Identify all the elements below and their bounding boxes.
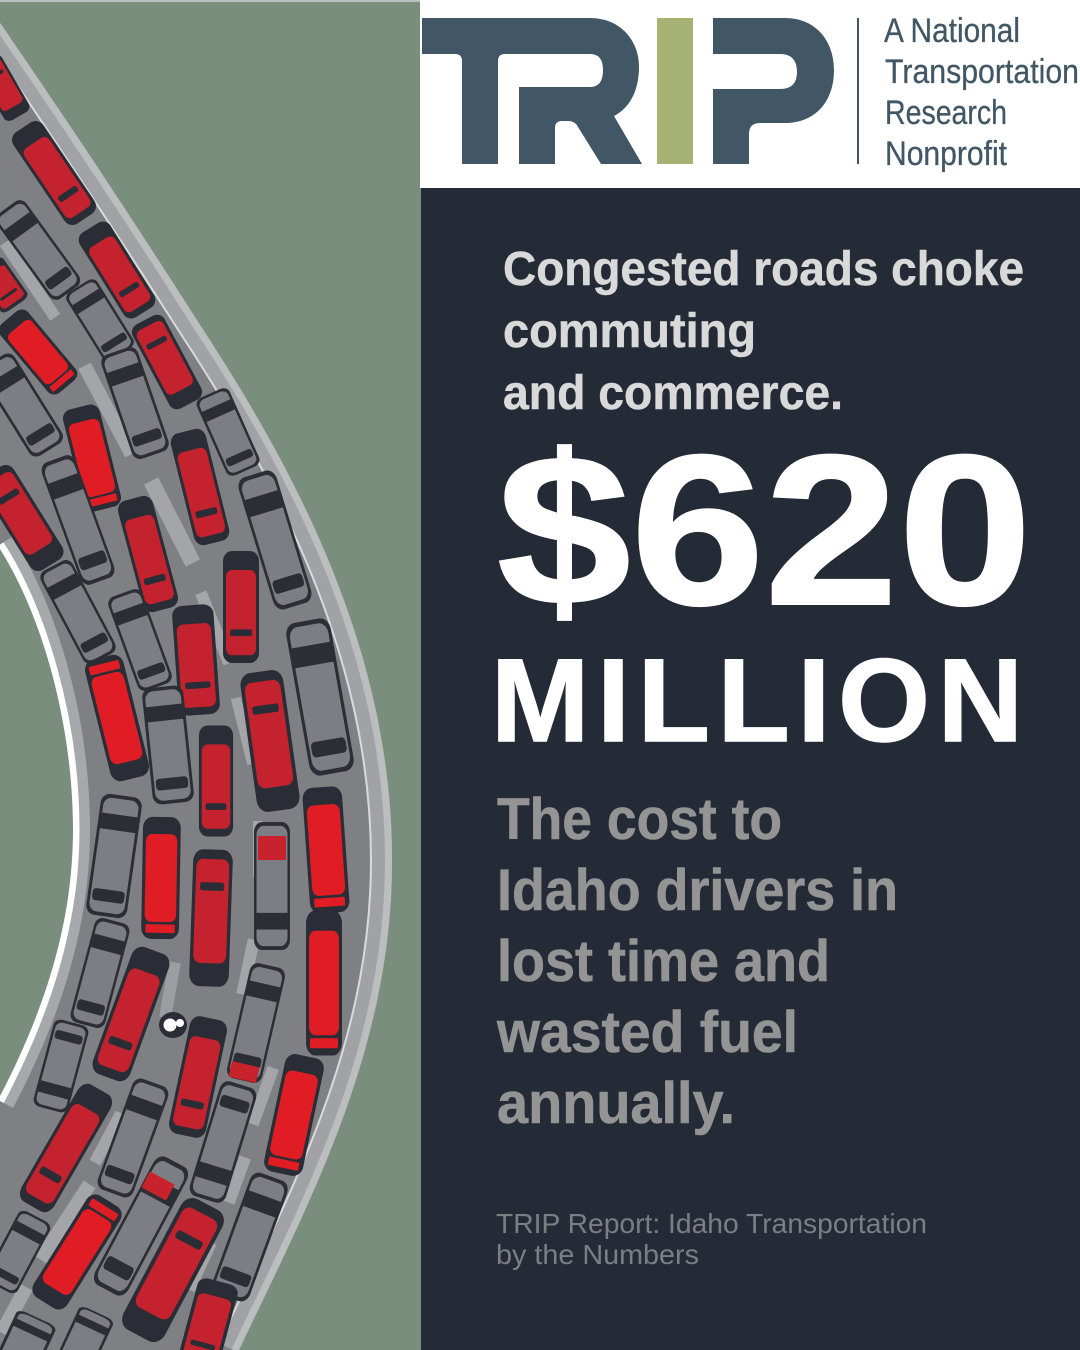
panel: dark text background	[421, 188, 1080, 1350]
logo: P letter	[713, 18, 834, 164]
big number unit: MILLION	[491, 635, 1023, 767]
tagline	[884, 12, 1079, 173]
description: Idaho drivers in	[497, 858, 898, 923]
description	[496, 787, 898, 1136]
source	[496, 1208, 927, 1270]
description: The cost to	[497, 787, 782, 852]
big number: $620	[497, 411, 1032, 650]
heading: Congested roads choke	[503, 243, 1024, 296]
panel: TRIP logo header	[420, 0, 1080, 188]
panel: road illustration	[0, 0, 421, 1350]
logo: green I	[657, 18, 693, 164]
description: lost time and	[497, 929, 830, 994]
logo: TR letters	[422, 18, 642, 164]
tagline: Research	[885, 94, 1007, 132]
heading: commuting	[503, 305, 756, 358]
cars in traffic	[0, 53, 356, 1350]
source: TRIP Report: Idaho Transportation	[496, 1208, 927, 1239]
source: by the Numbers	[496, 1239, 699, 1270]
description: wasted fuel	[496, 1000, 798, 1065]
road surface with shoulders	[0, 20, 392, 1350]
logo divider	[857, 18, 859, 164]
lane markings	[0, 239, 279, 1336]
heading: and commerce.	[503, 367, 843, 420]
description: annually.	[497, 1071, 735, 1136]
heading	[503, 243, 1024, 420]
white blob on the road	[159, 1012, 187, 1038]
tagline: Nonprofit	[885, 135, 1007, 173]
tagline: A National	[884, 12, 1020, 50]
